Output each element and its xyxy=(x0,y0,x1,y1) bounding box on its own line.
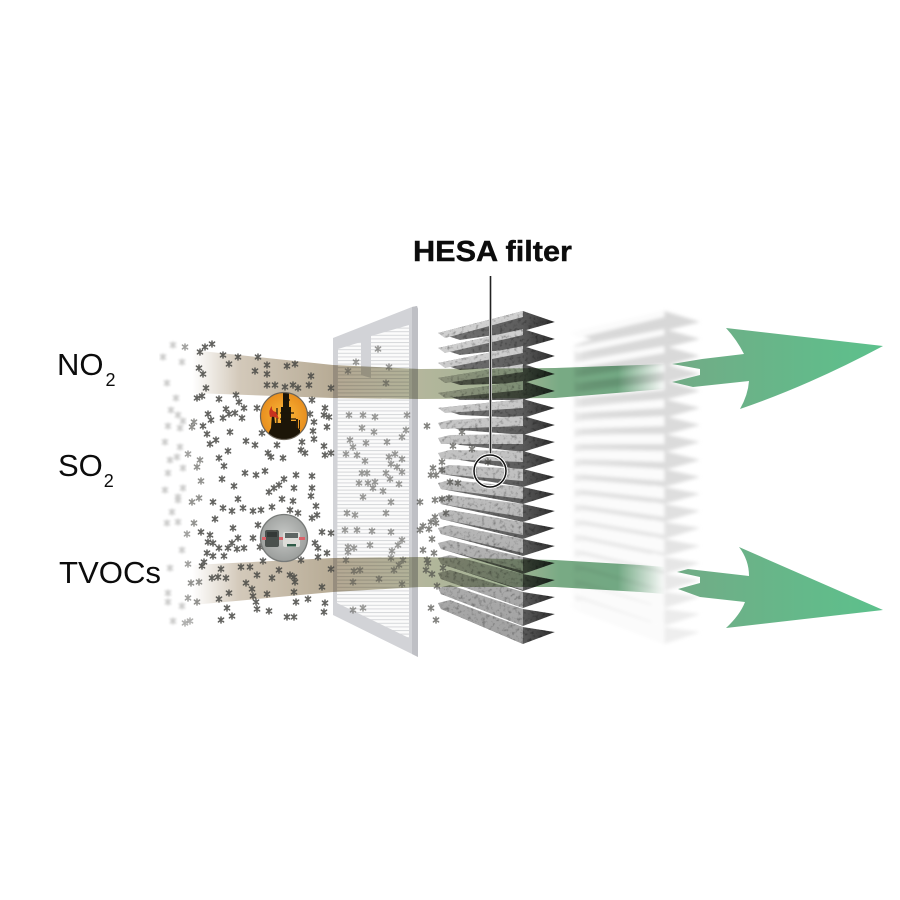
particles: lower pollutant cloud xyxy=(182,495,334,626)
particles: faded at left edge xyxy=(160,342,186,624)
icon: refinery xyxy=(261,393,307,439)
label: NO2: 2 xyxy=(106,370,116,390)
label: SO2: SO xyxy=(58,448,103,483)
particles: passing through the frame xyxy=(342,346,410,613)
label: NO2: NO xyxy=(57,347,104,382)
label: TVOCs: TVOCs xyxy=(59,555,161,590)
band: upper air flow xyxy=(192,350,665,399)
heading: HESA filter: HESA filter xyxy=(413,236,572,268)
particles: reaching the HESA filter xyxy=(417,423,491,623)
panel: HESA pleated filter xyxy=(438,311,555,644)
band: lower air flow xyxy=(192,557,665,605)
icon: traffic smog xyxy=(260,514,308,562)
label: SO2: 2 xyxy=(104,471,114,491)
panel: ghost filter after clean air xyxy=(560,300,700,660)
icon: traffic ring xyxy=(260,514,308,562)
panel: pre-filter frame xyxy=(333,306,418,657)
arrow: lower clean air xyxy=(677,547,883,628)
arrow: upper clean air xyxy=(672,328,883,409)
callout: leader line and magnifier ring xyxy=(474,276,506,487)
particles: upper pollutant cloud xyxy=(182,341,334,499)
icon: refinery ring xyxy=(260,392,308,440)
